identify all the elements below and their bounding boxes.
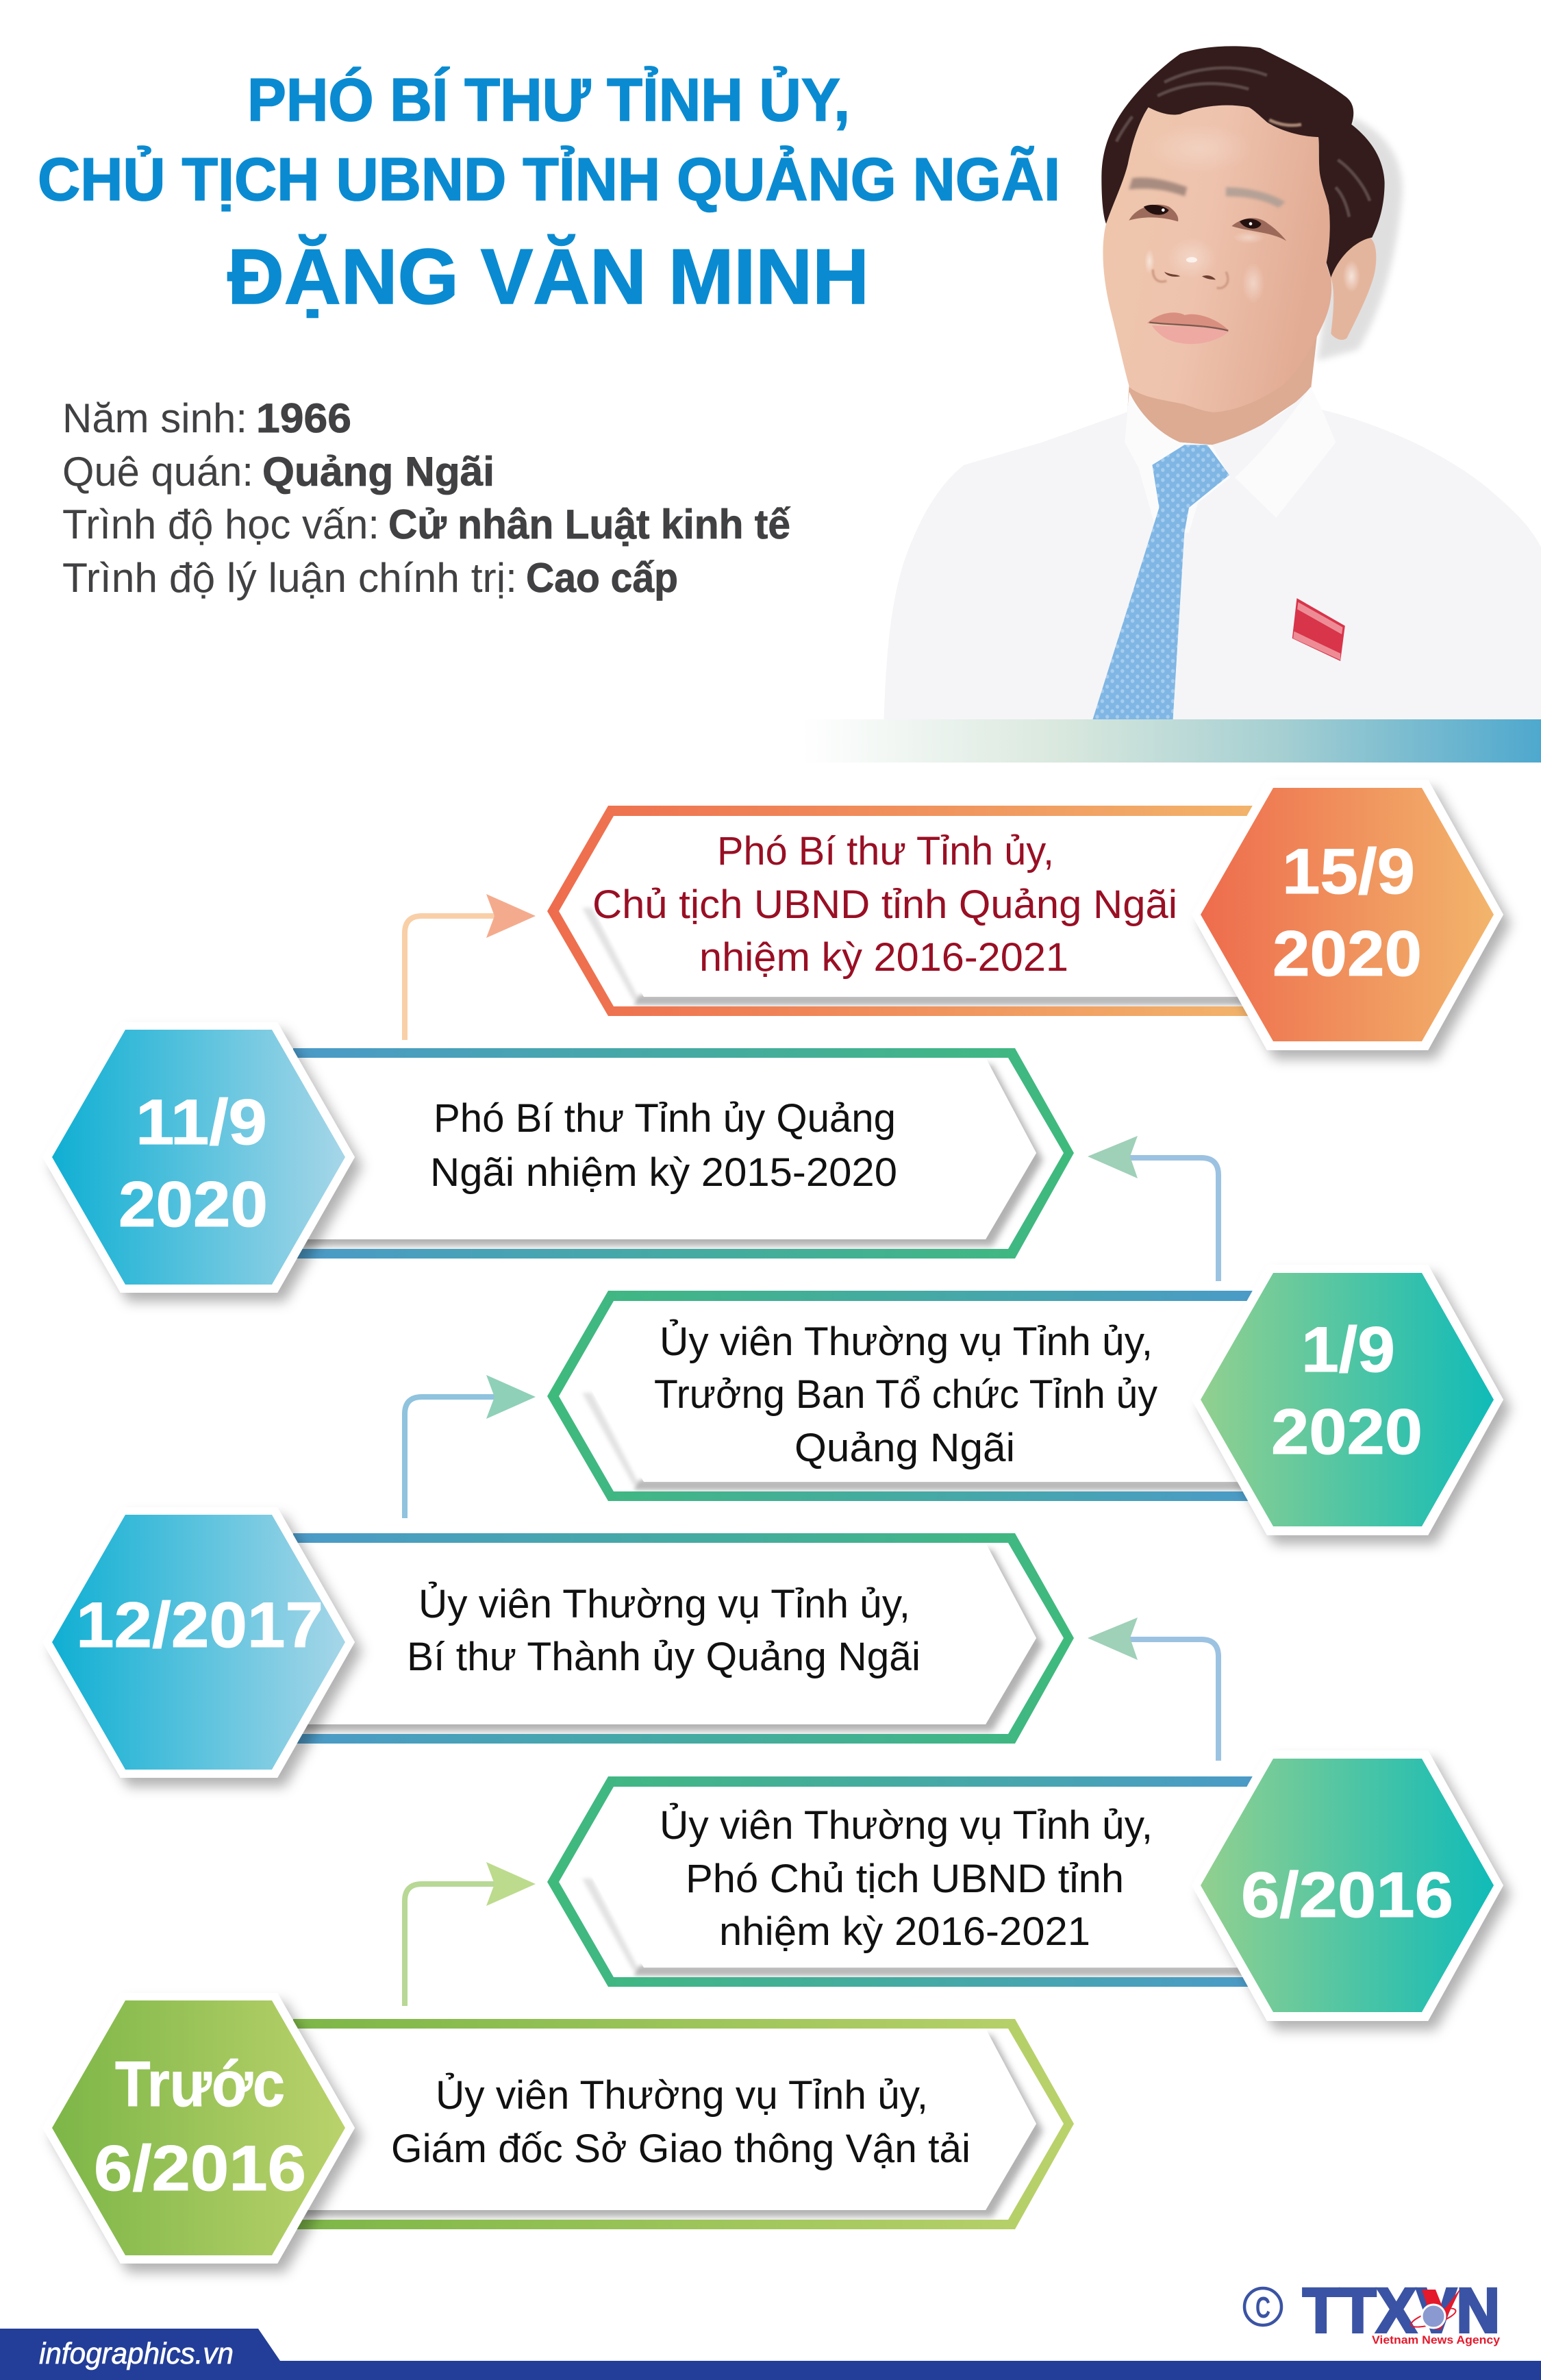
text: position 1: Phó Bí thư Tỉnh ủy, [717,829,1054,873]
hexagon: 11/9 2020: 2020 [118,1168,268,1240]
text: position 6: Giám đốc Sở Giao thông Vận tải [391,2127,970,2171]
hexagon: 1/9 2020: 1/9 [1301,1313,1395,1385]
text: position 3: Quảng Ngãi [794,1426,1015,1470]
title [38,66,1060,321]
personal info: Quê quán: [62,449,253,495]
text: position 3: Ủy viên Thường vụ Tỉnh ủy, [660,1319,1153,1364]
text: position 3 [654,1319,1157,1470]
arrow: row 4 to row 3 [405,1375,536,1518]
logo: TTXVN: C [1255,2291,1270,2325]
title: PHÓ BÍ THƯ TỈNH ỦY, [247,66,850,134]
hexagon: 6/2016 [1192,1750,1503,2021]
title: CHỦ TỊCH UBND TỈNH QUẢNG NGÃI [38,145,1060,213]
text: position 2: Ngãi nhiệm kỳ 2015-2020 [430,1150,897,1195]
text: position 2: Phó Bí thư Tỉnh ủy Quảng [434,1096,896,1141]
hexagon: 1/9 2020: 2020 [1271,1396,1423,1467]
personal info [62,395,791,601]
text: position 4: Bí thư Thành ủy Quảng Ngãi [407,1635,920,1679]
logo: TTXVN: TTXVN [1303,2276,1500,2346]
personal info: Năm sinh: [62,395,247,441]
text: position 5: nhiệm kỳ 2016-2021 [719,1909,1090,1954]
panel: 15/9/2020 [547,806,1267,1016]
personal info: Trình độ học vấn: [62,501,379,547]
hexagon: 11/9 2020 [42,1022,355,1293]
text: position 6: Ủy viên Thường vụ Tỉnh ủy, [436,2073,928,2118]
hexagon: 6/2016: 6/2016 [1241,1859,1453,1931]
personal info: Quảng Ngãi [262,449,494,495]
footer bar [0,2329,1541,2380]
text: position 5: Phó Chủ tịch UBND tỉnh [686,1857,1124,1901]
panel: 1/9/2020 [547,1291,1267,1501]
panel: 12/2017 [288,1533,1074,1744]
hexagon: 12/2017 [42,1507,355,1778]
hexagon: 15/9 2020 [1192,780,1503,1050]
hexagon: before 6/2016: Trước [115,2048,285,2120]
personal info: Cao cấp [526,555,678,601]
text: position 1: nhiệm kỳ 2016-2021 [699,935,1068,980]
arrow: row 5 to row 4 [1088,1617,1218,1761]
gradient band [801,719,1541,763]
panel: 6/2016 [547,1776,1267,1987]
personal info: Cử nhân Luật kinh tế [388,501,791,547]
personal info: Trình độ lý luận chính trị: [62,555,517,601]
hexagon: 11/9 2020: 11/9 [136,1086,267,1158]
arrow: row 6 to row 5 [405,1862,536,2006]
text: position 5: Ủy viên Thường vụ Tỉnh ủy, [660,1803,1153,1848]
arrow: row 2 to row 1 [405,894,536,1040]
hexagon: 15/9 2020: 2020 [1273,917,1422,989]
title: ĐẶNG VĂN MINH [227,234,869,321]
hexagon: 12/2017: 12/2017 [76,1589,323,1661]
footer site label: infographics.vn [39,2337,234,2370]
arrow: row 3 to row 2 [1088,1136,1218,1281]
personal info: 1966 [256,395,351,441]
panel: before 6/2016 [288,2019,1074,2229]
text: position 1: Chủ tịch UBND tỉnh Quảng Ngãi [592,882,1177,927]
hexagon: before 6/2016 [42,1993,355,2264]
text: position 2 [430,1096,897,1195]
text: position 6 [391,2073,970,2171]
hexagon: before 6/2016: 6/2016 [94,2132,306,2204]
text: position 5 [660,1803,1153,1954]
portrait photo [884,46,1541,720]
text: position 3: Trưởng Ban Tổ chức Tỉnh ủy [654,1372,1157,1417]
text: position 4: Ủy viên Thường vụ Tỉnh ủy, [418,1582,910,1626]
logo: TTXVN: Vietnam News Agency [1372,2333,1501,2346]
hexagon: 1/9 2020 [1192,1265,1503,1535]
panel: 11/9/2020 [288,1048,1074,1259]
hexagon: 15/9 2020: 15/9 [1282,835,1415,907]
text: position 1 [592,829,1177,980]
text: position 4 [407,1582,920,1679]
